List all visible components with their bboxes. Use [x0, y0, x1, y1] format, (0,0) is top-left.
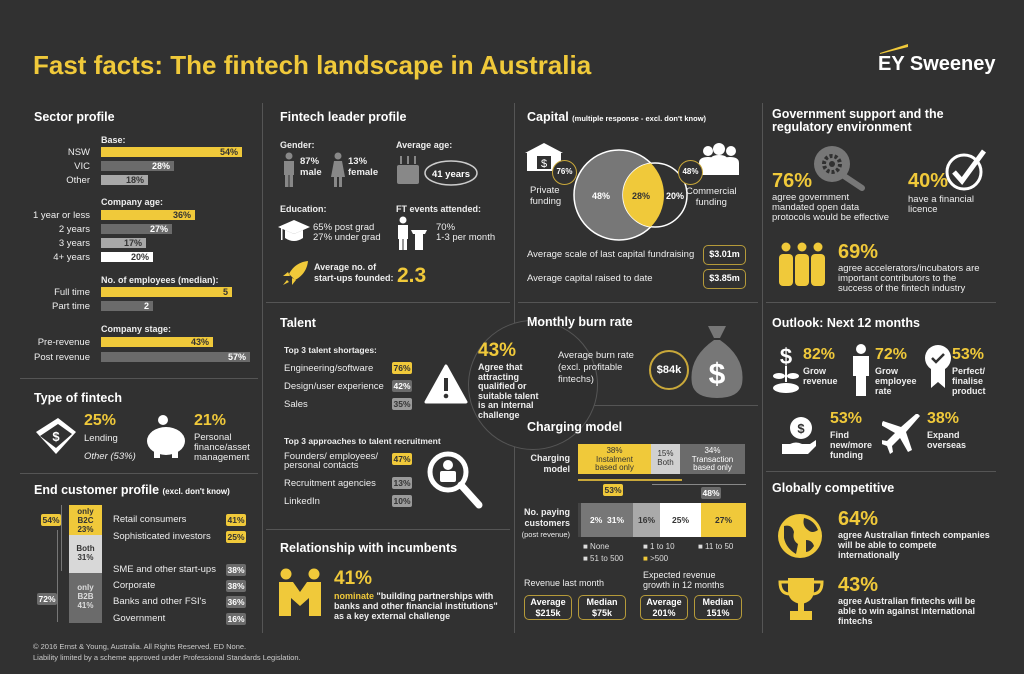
panel: talent: 47%	[393, 454, 410, 464]
footer: © 2016 Ernst & Young, Australia. All Rights Reserved. ED None.	[33, 642, 246, 651]
icon: podium	[398, 216, 427, 250]
panel: outlook	[772, 316, 986, 460]
icon: cake	[397, 156, 478, 186]
panel: fintech leader profile: Gender:	[280, 140, 315, 150]
panel: government support	[772, 107, 986, 294]
panel: globally competitive: able to win against international	[838, 606, 975, 616]
panel: outlook: funding	[830, 450, 863, 460]
panel: talent: Design/user experience	[284, 381, 384, 392]
panel: sector profile: 36%	[173, 210, 191, 220]
stacked bar: charging model: Transaction	[692, 454, 733, 464]
panel: sector profile	[33, 110, 250, 363]
stacked bar: charging model: 15%	[657, 449, 674, 458]
panel: capital: Average capital raised to date	[527, 273, 653, 284]
icon: money	[36, 418, 76, 454]
panel: government support: success of the fintech industry	[838, 283, 965, 294]
panel: fintech leader profile: Average no. of	[314, 262, 376, 272]
callout: talent challenge: is an internal	[478, 400, 534, 410]
panel: sector profile: Company stage:	[101, 324, 171, 334]
panel: charging model: Charging	[530, 453, 570, 463]
panel: globally competitive: agree Australian fintech companies	[838, 530, 990, 540]
icon: magnifier person	[428, 452, 482, 508]
panel: sector profile: Full time	[54, 287, 90, 298]
panel: end customer profile: Banks and other FSI's	[113, 596, 206, 607]
stacked bar: 23%	[77, 525, 94, 534]
panel: fintech leader profile: 13%	[348, 156, 367, 167]
panel: charging model: Average	[646, 597, 682, 607]
panel: type of fintech: Lending	[84, 433, 118, 444]
panel: government support: agree accelerators/incubators are	[838, 263, 980, 274]
legend	[583, 542, 733, 563]
panel: talent: Engineering/software	[284, 363, 373, 374]
panel: capital: Private	[530, 185, 560, 196]
stacked bar: only	[77, 583, 94, 592]
heading: regulatory environment	[772, 120, 912, 134]
panel: end customer profile: 25%	[227, 532, 244, 542]
footer: Liability limited by a scheme approved under Professional Standards Legislation.	[33, 653, 301, 662]
heading: Monthly burn rate	[527, 315, 633, 329]
icon: bank: $	[541, 158, 547, 170]
stacked bar: charging model: based only	[693, 463, 732, 472]
icon: male	[284, 152, 294, 187]
panel: outlook: 53%	[952, 346, 984, 363]
panel: end customer profile: Retail consumers	[113, 514, 186, 525]
panel: talent: 13%	[393, 478, 410, 488]
callout: talent challenge: suitable talent	[478, 390, 539, 400]
icon: globe	[776, 512, 824, 560]
panel: sector profile: 17%	[124, 238, 142, 248]
panel: fintech leader profile: 1-3 per month	[436, 232, 495, 243]
panel: charging model: 151%	[706, 608, 730, 618]
panel: end customer profile: Corporate	[113, 580, 155, 591]
panel: sector profile: 57%	[228, 352, 246, 362]
callout: talent challenge: 43%	[478, 340, 516, 361]
panel: end customer profile: 41%	[227, 515, 244, 525]
heading: Capital (multiple response - excl. don't know)	[527, 110, 706, 124]
panel: sector profile: Part time	[52, 301, 90, 312]
panel: capital: funding	[530, 196, 561, 207]
panel: monthly burn rate: fintechs)	[558, 374, 594, 385]
stacked bar: charging model: 38%	[606, 446, 622, 455]
panel: type of fintech: finance/asset	[194, 442, 250, 453]
panel: sector profile: 2 years	[59, 224, 90, 235]
panel: outlook: 38%	[927, 410, 959, 427]
panel: relationship with incumbents: nominate "building partnerships with	[334, 591, 493, 601]
panel: fintech leader profile: 65% post grad	[313, 222, 374, 233]
panel: globally competitive	[766, 478, 1000, 628]
panel: capital: 48%	[682, 167, 698, 176]
panel: government support: agree government	[772, 192, 849, 203]
panel: fintech leader profile: Education:	[280, 204, 326, 214]
icon: trophy	[778, 576, 824, 622]
stacked bar: B2C	[77, 516, 94, 525]
panel: monthly burn rate: $84k	[657, 364, 681, 376]
callout: talent challenge	[468, 320, 598, 450]
panel: outlook: Find	[830, 430, 849, 440]
panel: outlook: Expand	[927, 430, 960, 440]
panel: government support: 69%	[838, 241, 878, 263]
panel: outlook: Perfect/	[952, 366, 985, 376]
stacked bar: paying customers: 16%	[638, 515, 655, 525]
heading: Sector profile	[34, 110, 115, 124]
panel: government support: important contributors to the	[838, 273, 956, 284]
panel: capital: Commercial	[686, 186, 737, 197]
panel: talent: Top 3 approaches to talent recruitment	[284, 436, 441, 446]
panel: end customer profile: Government	[113, 613, 165, 624]
icon: check circle	[946, 150, 986, 190]
stacked bar: only	[77, 507, 94, 516]
stacked bar: charging model: Instalment	[596, 454, 633, 464]
panel: talent: personal contacts	[284, 460, 358, 471]
panel: government support: protocols would be effective	[772, 212, 889, 223]
panel: charging model: $215k	[535, 608, 561, 618]
stacked bar: paying customers	[578, 503, 746, 537]
panel: monthly burn rate	[527, 315, 742, 398]
panel: type of fintech: management	[194, 452, 249, 463]
panel: end customer profile: Sophisticated investors	[113, 531, 211, 542]
legend: ■ None	[583, 542, 609, 551]
panel: globally competitive: 64%	[838, 508, 878, 530]
icon: businessman	[853, 344, 869, 396]
panel: talent: Top 3 talent shortages:	[284, 345, 377, 355]
panel: type of fintech: Personal	[194, 432, 232, 443]
panel: government support: mandated open data	[772, 202, 859, 213]
panel: type of fintech: 21%	[194, 412, 226, 429]
panel: talent: 42%	[393, 381, 410, 391]
panel: monthly burn rate: Average burn rate	[558, 350, 634, 361]
panel: sector profile: 4+ years	[53, 252, 90, 263]
logo: EY Sweeney	[878, 53, 995, 75]
panel: outlook: revenue	[803, 376, 838, 386]
panel: charging model	[522, 420, 746, 620]
icon: hand money	[782, 414, 816, 456]
panel: charging model: 48%	[702, 488, 720, 498]
panel: fintech leader profile: 27% under grad	[313, 232, 381, 243]
panel: relationship with incumbents: as a key external challenge	[334, 611, 450, 621]
stacked bar	[69, 505, 102, 623]
panel: capital: funding	[696, 197, 727, 208]
legend: ■ 51 to 500	[583, 554, 623, 563]
panel: fintech leader profile	[278, 110, 495, 287]
panel: sector profile: Pre-revenue	[38, 337, 90, 348]
panel: globally competitive: agree Australian fintechs will be	[838, 596, 975, 606]
icon: piggy bank	[147, 415, 185, 458]
panel: fintech leader profile: Average age:	[396, 140, 452, 150]
panel: fintech leader profile: FT events attended:	[396, 204, 481, 214]
panel: sector profile: VIC	[74, 161, 90, 172]
panel: government support: licence	[908, 204, 938, 215]
icon: handshake people	[279, 568, 321, 616]
panel: charging model: Median	[702, 597, 734, 607]
panel: fintech leader profile: female	[348, 167, 378, 178]
panel: capital	[525, 110, 746, 289]
panel: capital: 76%	[556, 167, 572, 176]
heading: Talent	[280, 316, 316, 330]
panel: end customer profile: 72%	[38, 594, 56, 604]
panel: outlook: finalise	[952, 376, 983, 386]
panel: outlook: overseas	[927, 440, 966, 450]
heading: Charging model	[527, 420, 622, 434]
icon: money bag	[692, 326, 742, 398]
dividers	[262, 103, 263, 633]
panel: charging model: growth in 12 months	[643, 580, 724, 590]
panel: sector profile: 43%	[191, 337, 209, 347]
panel: outlook: Grow	[803, 366, 826, 376]
panel: capital: Average scale of last capital fundraising	[527, 249, 694, 260]
icon: gear magnifier	[814, 146, 865, 191]
icon: money bag: $	[709, 358, 726, 391]
heading: Government support and the	[772, 107, 944, 121]
panel: end customer profile: 36%	[227, 597, 244, 607]
panel: sector profile: 18%	[126, 175, 144, 185]
panel: relationship with incumbents: banks and other financial institutions"	[334, 601, 498, 611]
panel: globally competitive: internationally	[838, 550, 900, 560]
venn diagram: 48%	[592, 191, 610, 201]
panel: end customer profile: 16%	[227, 614, 244, 624]
panel: sector profile: 54%	[220, 147, 238, 157]
heading: Fintech leader profile	[280, 110, 406, 124]
stacked bar: charging model: based only	[595, 463, 634, 472]
panel: talent: 35%	[393, 399, 410, 409]
panel: talent: Recruitment agencies	[284, 478, 376, 489]
panel: sector profile: 28%	[152, 161, 170, 171]
panel: outlook: 82%	[803, 346, 835, 363]
panel: talent: LinkedIn	[284, 496, 320, 507]
heading	[772, 107, 944, 134]
icon: dollar plant: $	[780, 344, 792, 369]
panel: talent: Founders/ employees/	[284, 451, 378, 462]
panel: outlook: 72%	[875, 346, 907, 363]
panel: type of fintech: Other (53%)	[84, 451, 136, 462]
panel: outlook: Grow	[875, 366, 898, 376]
panel: end customer profile	[34, 483, 246, 625]
icon: people	[699, 143, 739, 175]
icon: bank	[525, 143, 563, 171]
panel: sector profile: 27%	[150, 224, 168, 234]
panel: end customer profile: 38%	[227, 565, 244, 575]
panel: charging model: (post revenue)	[522, 530, 570, 539]
panel: sector profile: 2	[144, 301, 149, 311]
stacked bar: charging model	[578, 444, 745, 474]
panel: fintech leader profile: 87%	[300, 156, 319, 167]
panel: talent	[280, 316, 482, 508]
panel: end customer profile: SME and other start-ups	[113, 564, 216, 575]
venn diagram: 28%	[632, 191, 650, 201]
panel: sector profile: Other	[66, 175, 90, 186]
icon: money: $	[52, 429, 60, 444]
panel: type of fintech	[34, 391, 250, 463]
heading: Type of fintech	[34, 391, 122, 405]
title: Fast facts: The fintech landscape in Australia	[33, 50, 591, 80]
legend: ■ >500	[643, 554, 668, 563]
panel: sector profile: NSW	[68, 147, 90, 158]
venn diagram: 20%	[666, 191, 684, 201]
heading: Globally competitive	[772, 481, 894, 495]
heading: End customer profile (excl. don't know)	[34, 483, 230, 497]
legend: ■ 1 to 10	[643, 542, 675, 551]
stacked bar: paying customers: 25%	[672, 515, 689, 525]
panel: charging model: $75k	[592, 608, 612, 618]
stacked bar: B2B	[77, 592, 94, 601]
icon: hand money: $	[797, 421, 805, 436]
icon: team	[779, 242, 825, 286]
panel: type of fintech: 25%	[84, 412, 116, 429]
panel: talent: 10%	[393, 496, 410, 506]
panel: charging model: 201%	[652, 608, 676, 618]
panel: charging model: Average	[530, 597, 566, 607]
stacked bar: charging model: 34%	[704, 446, 720, 455]
panel: fintech leader profile: start-ups founded:	[314, 273, 394, 283]
panel: talent: 76%	[393, 363, 410, 373]
panel: charging model: No. paying	[524, 507, 570, 517]
panel: sector profile: Company age:	[101, 197, 163, 207]
panel: charging model: Expected revenue	[643, 570, 716, 580]
icon: badge	[925, 345, 951, 388]
panel: sector profile: 1 year or less	[33, 210, 90, 221]
panel: charging model: Median	[586, 597, 618, 607]
icon: rocket	[283, 261, 308, 285]
venn diagram	[573, 149, 688, 241]
panel: fintech leader profile: male	[300, 167, 322, 178]
panel: talent: Sales	[284, 399, 308, 410]
icon: cake: 41 years	[432, 169, 470, 180]
panel: sector profile: 20%	[131, 252, 149, 262]
icon: dollar plant	[773, 344, 799, 393]
panel: outlook: new/more	[830, 440, 872, 450]
panel: government support: 40%	[908, 170, 948, 192]
stacked bar: 41%	[77, 601, 94, 610]
panel: end customer profile: 54%	[42, 515, 60, 525]
panel: sector profile: 5	[223, 287, 228, 297]
panel: relationship with incumbents	[279, 541, 498, 621]
stacked bar: Both	[76, 544, 95, 553]
panel: globally competitive: fintechs	[838, 616, 873, 626]
panel: fintech leader profile: 70%	[436, 222, 455, 233]
panel: charging model: customers	[524, 518, 570, 528]
callout: talent challenge: attracting	[478, 372, 519, 382]
panel: sector profile: No. of employees (median):	[101, 275, 219, 285]
heading: Outlook: Next 12 months	[772, 316, 920, 330]
stacked bar: charging model: Both	[657, 458, 674, 466]
panel: outlook: product	[952, 386, 986, 396]
heading: Relationship with incumbents	[280, 541, 457, 555]
panel: sector profile: Post revenue	[34, 352, 90, 363]
stacked bar: paying customers: 27%	[715, 515, 732, 525]
icon: warning	[424, 364, 468, 404]
panel: monthly burn rate: (excl. profitable	[558, 362, 622, 373]
panel: charging model: Revenue last month	[524, 578, 604, 588]
panel: outlook: rate	[875, 386, 892, 396]
icon: female	[331, 152, 345, 187]
panel: end customer profile: 38%	[227, 581, 244, 591]
footer	[33, 642, 301, 662]
panel: charging model: 53%	[604, 485, 622, 495]
callout: talent challenge: qualified or	[478, 381, 527, 391]
panel: government support: have a financial	[908, 194, 974, 205]
panel: globally competitive: will be able to compete	[838, 540, 937, 550]
panel: sector profile: Base:	[101, 135, 126, 145]
icon: plane	[882, 414, 924, 454]
panel: charging model: model	[543, 464, 570, 474]
panel: outlook: 53%	[830, 410, 862, 427]
legend: ■ 11 to 50	[698, 542, 733, 551]
callout: talent challenge: Agree that	[478, 362, 523, 372]
icon: grad cap	[278, 220, 310, 241]
panel: government support: 76%	[772, 170, 812, 192]
stacked bar: 31%	[77, 553, 94, 562]
panel: sector profile: 3 years	[59, 238, 90, 249]
panel: globally competitive: 43%	[838, 574, 878, 596]
panel: capital: $3.85m	[709, 273, 740, 283]
panel: capital: $3.01m	[709, 249, 740, 259]
panel: fintech leader profile: 2.3	[397, 264, 426, 287]
callout: talent challenge: challenge	[478, 410, 520, 420]
panel: relationship with incumbents: 41%	[334, 568, 372, 589]
stacked bar: paying customers: 2% 31%	[590, 515, 624, 525]
panel: outlook: employee	[875, 376, 917, 386]
